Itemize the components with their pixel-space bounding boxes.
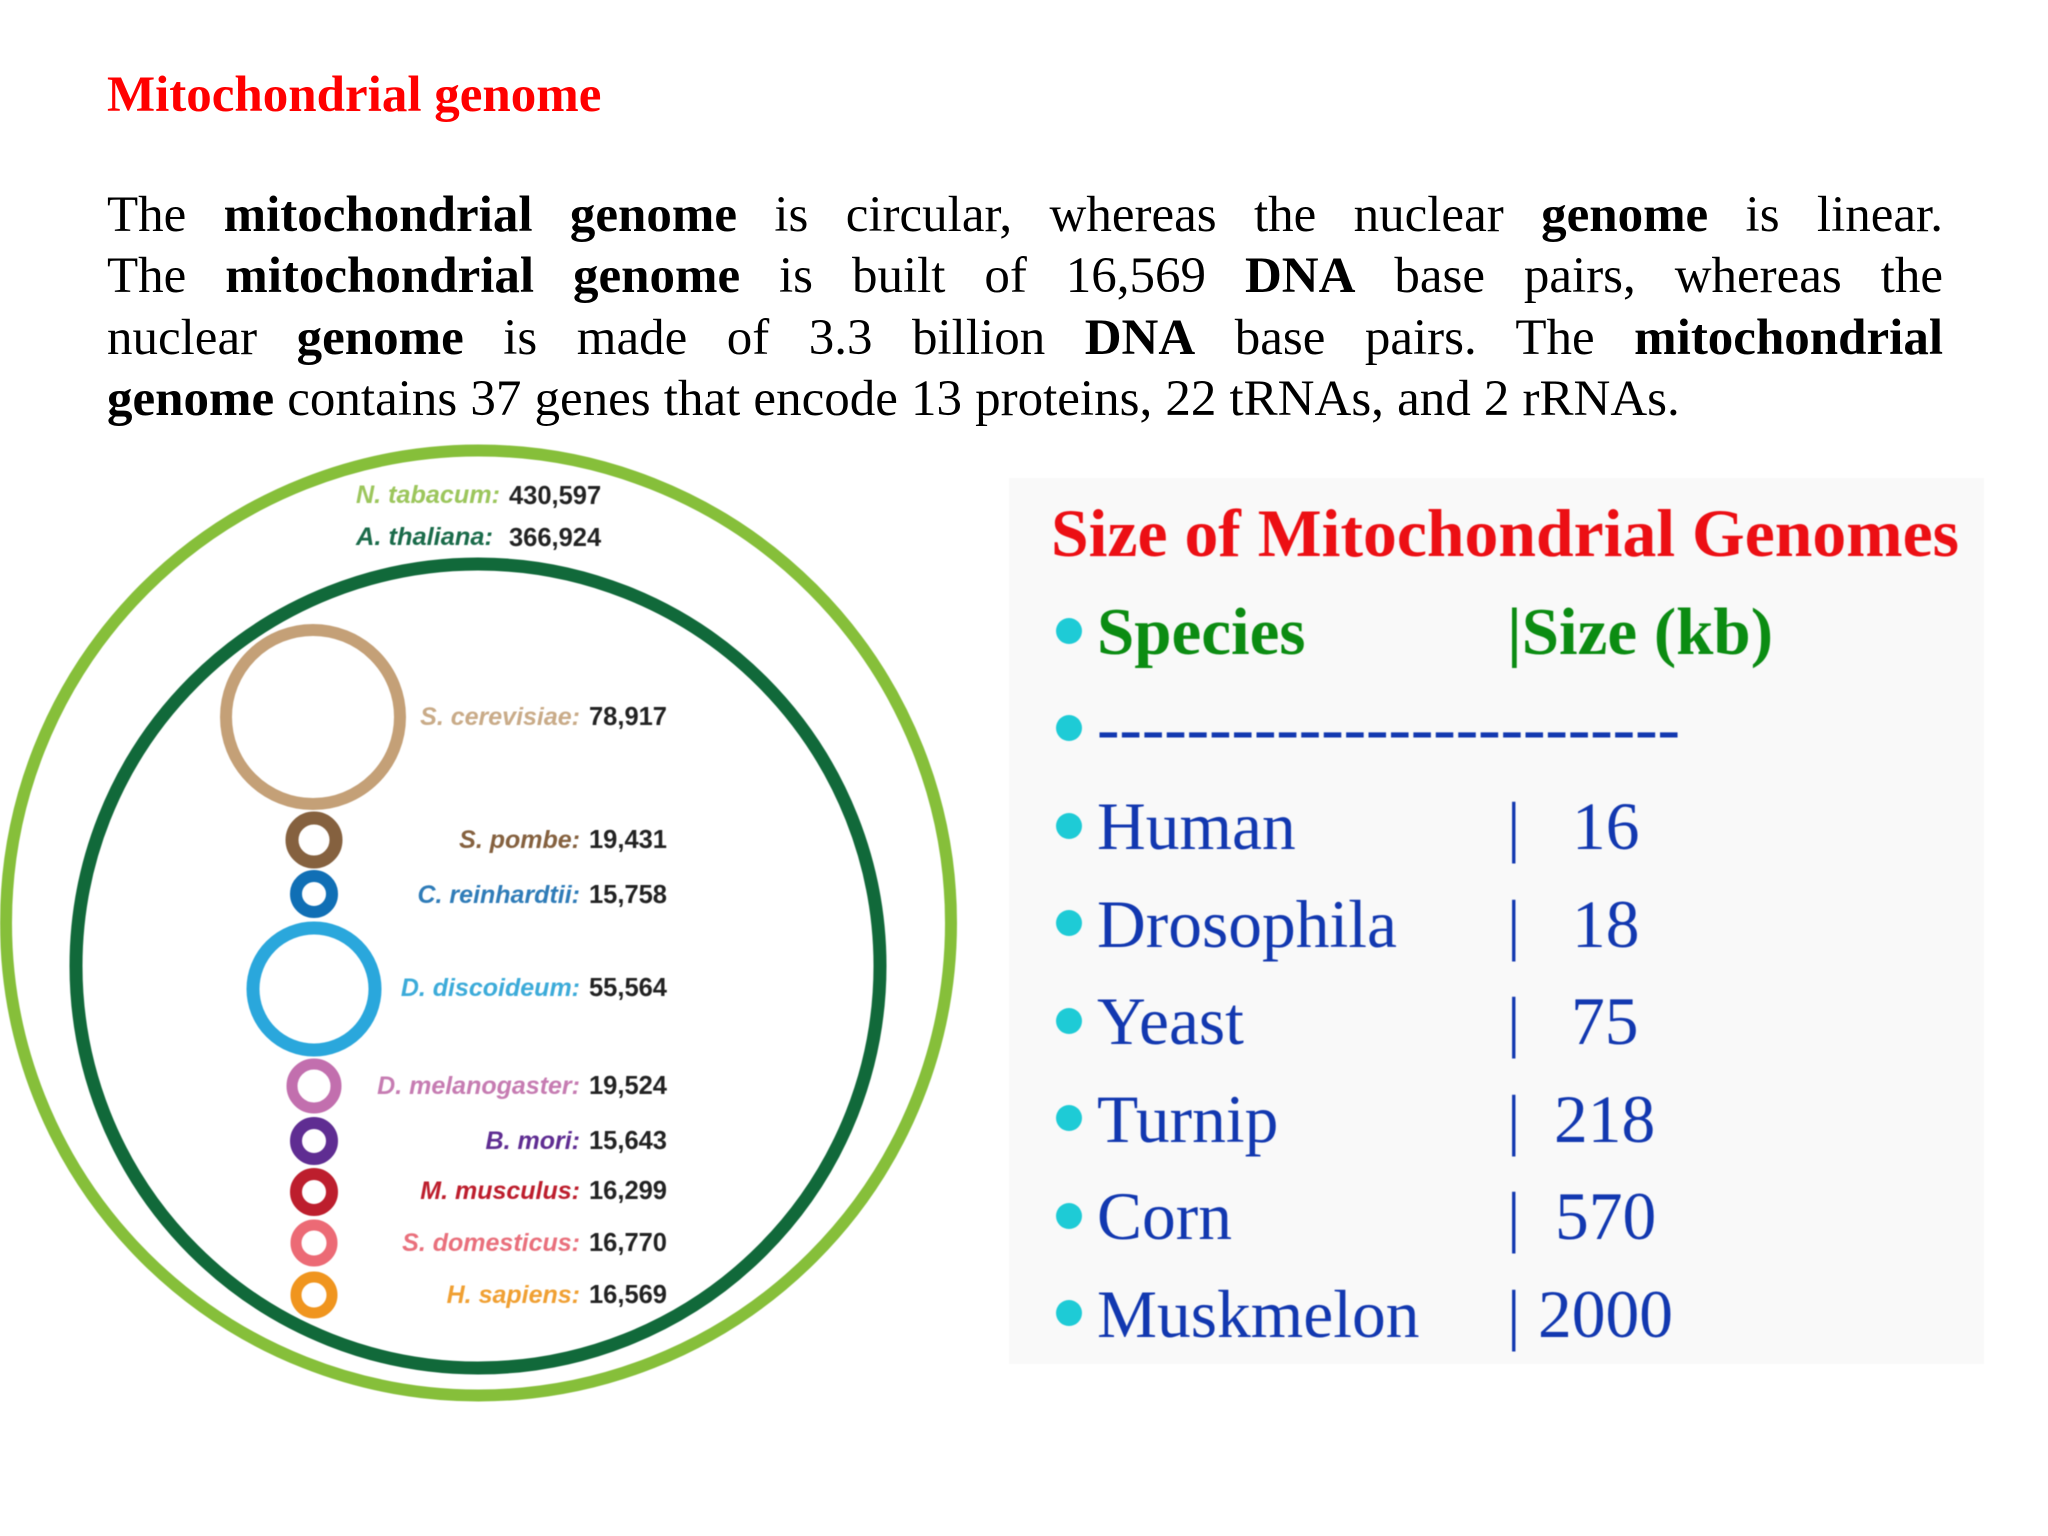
inner circle: A. thaliana bbox=[76, 564, 880, 1368]
row: Corn bbox=[1056, 1179, 1656, 1254]
label: N. tabacum: N. tabacum: bbox=[356, 481, 500, 509]
label: A. thaliana: A. thaliana: bbox=[355, 523, 493, 551]
table header row bbox=[1056, 595, 1773, 669]
ring: C. reinhardtii: C. reinhardtii: bbox=[417, 881, 580, 909]
ring: B. mori: 15,643 bbox=[589, 1127, 667, 1155]
panel background bbox=[1009, 478, 1984, 1364]
ring: S. domesticus: S. domesticus: bbox=[402, 1229, 580, 1257]
ring: S. pombe bbox=[292, 818, 667, 862]
ring: M. musculus: M. musculus: bbox=[420, 1177, 580, 1205]
row: Turnip: | bbox=[1507, 1082, 1521, 1157]
ring: D. melanogaster bbox=[292, 1064, 668, 1108]
row: Drosophila: Drosophila bbox=[1097, 887, 1397, 962]
row: Human: Human bbox=[1097, 789, 1296, 864]
label: A. thaliana bbox=[355, 523, 602, 552]
row: Drosophila: | bbox=[1507, 887, 1521, 962]
divider row: -------------------------- bbox=[1097, 691, 1680, 766]
ring: S. pombe: 19,431 bbox=[589, 826, 667, 854]
chart: nested circles of genome sizes bbox=[6, 450, 951, 1396]
row: Drosophila: 18 bbox=[1572, 887, 1640, 962]
row: Yeast bbox=[1056, 984, 1638, 1059]
title: Mitochondrial genome bbox=[107, 67, 601, 123]
row: Turnip bbox=[1056, 1082, 1655, 1157]
ring: S. cerevisiae: S. cerevisiae: bbox=[420, 703, 580, 731]
ring: H. sapiens: H. sapiens: bbox=[447, 1281, 580, 1309]
paragraph: mitochondrial genome description: genome contains 37 genes that encode 13 proteins, 22 tRNAs, and 2 rRNAs. bbox=[107, 371, 1680, 427]
table header row: |Size (kb) bbox=[1507, 595, 1773, 669]
paragraph: mitochondrial genome description bbox=[107, 187, 1943, 427]
ring: S. cerevisiae: 78,917 bbox=[589, 703, 667, 731]
paragraph: mitochondrial genome description: nuclear genome is made of 3.3 billion DNA base pairs. The mitochondrial bbox=[107, 310, 1943, 366]
ring: S. domesticus: 16,770 bbox=[589, 1229, 667, 1257]
table header row: Species bbox=[1097, 595, 1305, 669]
ring: B. mori: B. mori: bbox=[486, 1127, 580, 1155]
ring: D. discoideum: D. discoideum: bbox=[401, 974, 580, 1002]
ring: S. cerevisiae bbox=[226, 630, 667, 804]
row: Drosophila bbox=[1056, 887, 1640, 962]
paragraph: mitochondrial genome description: The mitochondrial genome is circular, whereas the nuclear genome is linear. bbox=[107, 187, 1943, 243]
label: A. thaliana: 366,924 bbox=[509, 524, 602, 552]
ring: B. mori bbox=[296, 1123, 667, 1159]
ring: D. discoideum bbox=[253, 928, 668, 1050]
row: Corn: Corn bbox=[1097, 1179, 1232, 1254]
ring: S. pombe: S. pombe: bbox=[459, 826, 580, 854]
panel: size of mitochondrial genomes bbox=[1009, 478, 1984, 1364]
ring: S. domesticus bbox=[296, 1225, 667, 1261]
ring: H. sapiens bbox=[296, 1277, 667, 1313]
ring: D. melanogaster: D. melanogaster: bbox=[377, 1072, 580, 1100]
outer circle: N. tabacum bbox=[6, 450, 951, 1396]
row: Human: 16 bbox=[1572, 789, 1640, 864]
row: Human: | bbox=[1507, 789, 1521, 864]
row: Yeast: | bbox=[1507, 984, 1521, 1059]
row: Yeast: Yeast bbox=[1097, 984, 1244, 1059]
row: Muskmelon: 2000 bbox=[1538, 1277, 1673, 1352]
ring: C. reinhardtii: 15,758 bbox=[589, 881, 667, 909]
label: N. tabacum bbox=[356, 481, 601, 510]
ring: M. musculus bbox=[296, 1174, 667, 1210]
row: Corn: 570 bbox=[1555, 1179, 1656, 1254]
row: Muskmelon: | bbox=[1507, 1277, 1521, 1352]
row: Muskmelon: Muskmelon bbox=[1097, 1277, 1420, 1352]
row: Human bbox=[1056, 789, 1640, 864]
ring: H. sapiens: 16,569 bbox=[589, 1281, 667, 1309]
ring: D. discoideum: 55,564 bbox=[589, 974, 668, 1002]
row: Turnip: 218 bbox=[1554, 1082, 1655, 1157]
row: Yeast: 75 bbox=[1571, 984, 1638, 1059]
ring: C. reinhardtii bbox=[296, 876, 667, 912]
ring: M. musculus: 16,299 bbox=[589, 1177, 667, 1205]
row: Muskmelon bbox=[1056, 1277, 1673, 1352]
row: Corn: | bbox=[1507, 1179, 1521, 1254]
paragraph: mitochondrial genome description: The mitochondrial genome is built of 16,569 DNA base pairs, whereas the bbox=[107, 248, 1943, 304]
ring: D. melanogaster: 19,524 bbox=[589, 1072, 668, 1100]
row: Turnip: Turnip bbox=[1097, 1082, 1278, 1157]
label: N. tabacum: 430,597 bbox=[509, 482, 601, 510]
panel heading: Size of Mitochondrial Genomes bbox=[1051, 495, 1959, 571]
